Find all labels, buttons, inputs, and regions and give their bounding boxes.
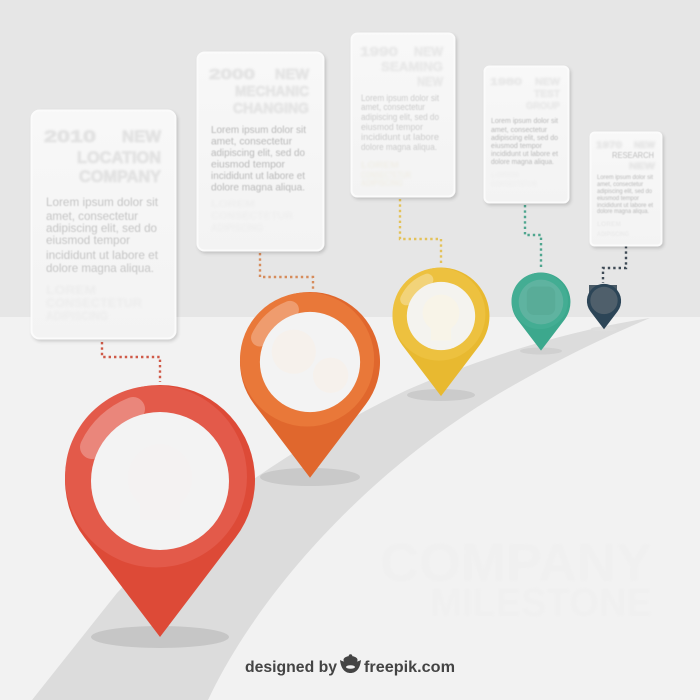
card 1970 footer text: [597, 221, 629, 238]
connector: yellow dotted line: [400, 199, 441, 266]
card 1990 body text: Lorem ipsum dolor sit: [361, 93, 439, 103]
card 2000 heading: [209, 66, 310, 117]
card 1990 heading: 1990: [360, 45, 398, 59]
card 1990 heading: SEAMING: [381, 60, 443, 74]
icon: faint light bulb: [128, 444, 192, 520]
card 2000 footer text: LOREM: [211, 198, 255, 210]
card 2000 body text: dolore magna aliqua.: [211, 182, 305, 194]
card 1980 footer text: CONSECTETUR: [491, 179, 537, 188]
card 2010 body text: adipiscing elit, sed do: [46, 221, 157, 235]
card 2010 body text: eiusmod tempor: [46, 233, 130, 247]
card 2010 footer text: CONSECTETUR: [46, 296, 142, 310]
card 1970 body text: amet, consectetur: [597, 181, 643, 188]
card 1970 body text: dolore magna aliqua.: [597, 208, 649, 215]
card 1980 body text: [491, 116, 559, 166]
card 2010 body text: [46, 195, 159, 275]
credit line: [245, 654, 455, 676]
watermark: COMPANY: [380, 533, 652, 593]
card 2010 footer text: ADIPISCING: [46, 309, 108, 323]
card 2000 body text: incididunt ut labore et: [211, 170, 305, 182]
card 1970 body text: eiusmod tempor: [597, 195, 639, 202]
card 1980 heading: GROUP: [526, 100, 560, 112]
panel: card 2010: [32, 110, 176, 338]
card 2010 footer text: LOREM: [46, 283, 96, 297]
card 1990 body text: incididunt ut labore: [361, 132, 439, 142]
card 1990 body text: dolore magna aliqua.: [361, 142, 437, 152]
card 1980 body text: dolore magna aliqua.: [491, 157, 554, 166]
card 2010 body text: dolore magna aliqua.: [46, 261, 154, 275]
card 1970 research label: RESEARCH: [612, 150, 654, 160]
credit line: freepik.com: [364, 659, 455, 676]
icon: faint gears: [272, 330, 348, 393]
card 1990 body text: [361, 93, 439, 152]
card 1980 body text: amet, consectetur: [491, 125, 547, 134]
card 2010 body text: Lorem ipsum dolor sit: [46, 195, 159, 209]
card 1970 body text: adipiscing elit, sed do: [597, 188, 653, 195]
card 1980 body text: incididunt ut labore et: [491, 149, 559, 158]
pin: red: [65, 385, 255, 637]
card 1970 body text: Lorem ipsum dolor sit: [597, 174, 653, 181]
card 2000 heading: NEW: [275, 66, 310, 83]
card 1970 heading: NEW: [634, 140, 656, 150]
card 1970 heading: NEW: [629, 161, 656, 171]
card 2000 body text: eiusmod tempor: [211, 158, 285, 170]
panel: card 2000: [198, 52, 324, 250]
card 1990 heading: NEW: [414, 45, 443, 59]
icon: square behind navy pin: [589, 285, 617, 305]
card 2010 heading: COMPANY: [79, 167, 162, 186]
connector: orange dotted line: [260, 253, 313, 290]
card 1980 heading: NEW: [535, 76, 560, 88]
card 2000 body text: amet, consectetur: [211, 136, 292, 148]
pin: teal: [512, 273, 570, 351]
pin: orange: [240, 292, 380, 478]
connector: navy dotted line: [603, 246, 626, 283]
card 1990 heading: [360, 45, 443, 89]
card 1970 footer text: LOREM: [597, 221, 621, 228]
credit line: designed by: [245, 659, 337, 676]
card 1990 footer text: CONSECTETUR: [361, 170, 411, 180]
floor: [0, 317, 700, 700]
card 2000 footer text: [211, 198, 293, 234]
card 2000 body text: adipiscing elit, sed do: [211, 147, 305, 159]
card 1990 body text: amet, consectetur: [361, 102, 425, 112]
card 1970 body text: incididunt ut labore et: [597, 202, 653, 209]
card 1980 body text: adipiscing elit, sed do: [491, 133, 558, 142]
card 2010 footer text: [46, 283, 142, 323]
card 1980 heading: [490, 76, 561, 112]
pin: yellow: [393, 268, 489, 396]
curved road: [32, 318, 650, 700]
card 2000 body text: Lorem ipsum dolor sit: [211, 124, 306, 136]
card 2010 heading: LOCATION: [77, 148, 161, 167]
watermark: [380, 533, 652, 625]
pin: navy: [587, 284, 621, 329]
card 1980 body text: eiusmod tempor: [491, 141, 542, 150]
card 2010 body text: amet, consectetur: [46, 209, 138, 223]
card 2000 heading: 2000: [209, 66, 255, 83]
panel: card 1990: [352, 34, 454, 196]
card 1980 footer text: [491, 170, 537, 188]
card 2010 heading: [44, 127, 162, 186]
icon: faint light bulb: [423, 295, 459, 340]
panel: card 1970 research: [590, 132, 662, 246]
card 1980 heading: TEST: [534, 88, 561, 100]
background wall: [0, 0, 700, 317]
card 2000 body text: [211, 124, 306, 194]
connector: teal dotted line: [525, 205, 541, 270]
card 1980 heading: 1980: [490, 76, 522, 88]
card 2010 body text: incididunt ut labore et: [46, 248, 159, 262]
card 1970 body text: [597, 174, 653, 215]
card 1990 footer text: [361, 160, 411, 188]
card 1980 body text: Lorem ipsum dolor sit: [491, 116, 559, 125]
pin shadow: orange: [260, 468, 360, 486]
card 1990 body text: adipiscing elit, sed do: [361, 112, 439, 122]
pin shadow: navy: [591, 326, 617, 332]
card 1990 footer text: LOREM: [361, 160, 399, 170]
icon: freepik logo: [340, 654, 361, 673]
card 2000 footer text: CONSECTETUR: [211, 210, 293, 222]
connector: red dotted line: [102, 342, 160, 382]
pin shadow: yellow: [407, 389, 475, 401]
card 1990 footer text: ADIPISCING: [361, 178, 403, 188]
card 1990 heading: NEW: [417, 75, 443, 89]
card 1990 body text: eiusmod tempor: [361, 122, 423, 132]
card 2000 heading: CHANGING: [233, 100, 309, 117]
card 2010 heading: NEW: [122, 127, 162, 146]
card 1970 heading: 1970: [596, 140, 622, 150]
pin shadow: red: [91, 626, 229, 648]
card 1970 footer text: ADIPISCING: [597, 231, 629, 238]
card 2010 heading: 2010: [44, 127, 96, 146]
card 1970 heading: [596, 140, 656, 171]
panel: card 1980: [484, 66, 568, 202]
card 2000 footer text: ADIPISCING: [211, 222, 263, 234]
icon: faint badge: [527, 286, 555, 315]
card 1980 footer text: LOREM: [491, 170, 519, 179]
pin shadow: teal: [520, 348, 562, 354]
watermark: MILESTONE: [430, 581, 652, 625]
card 2000 heading: MECHANIC: [235, 83, 309, 100]
